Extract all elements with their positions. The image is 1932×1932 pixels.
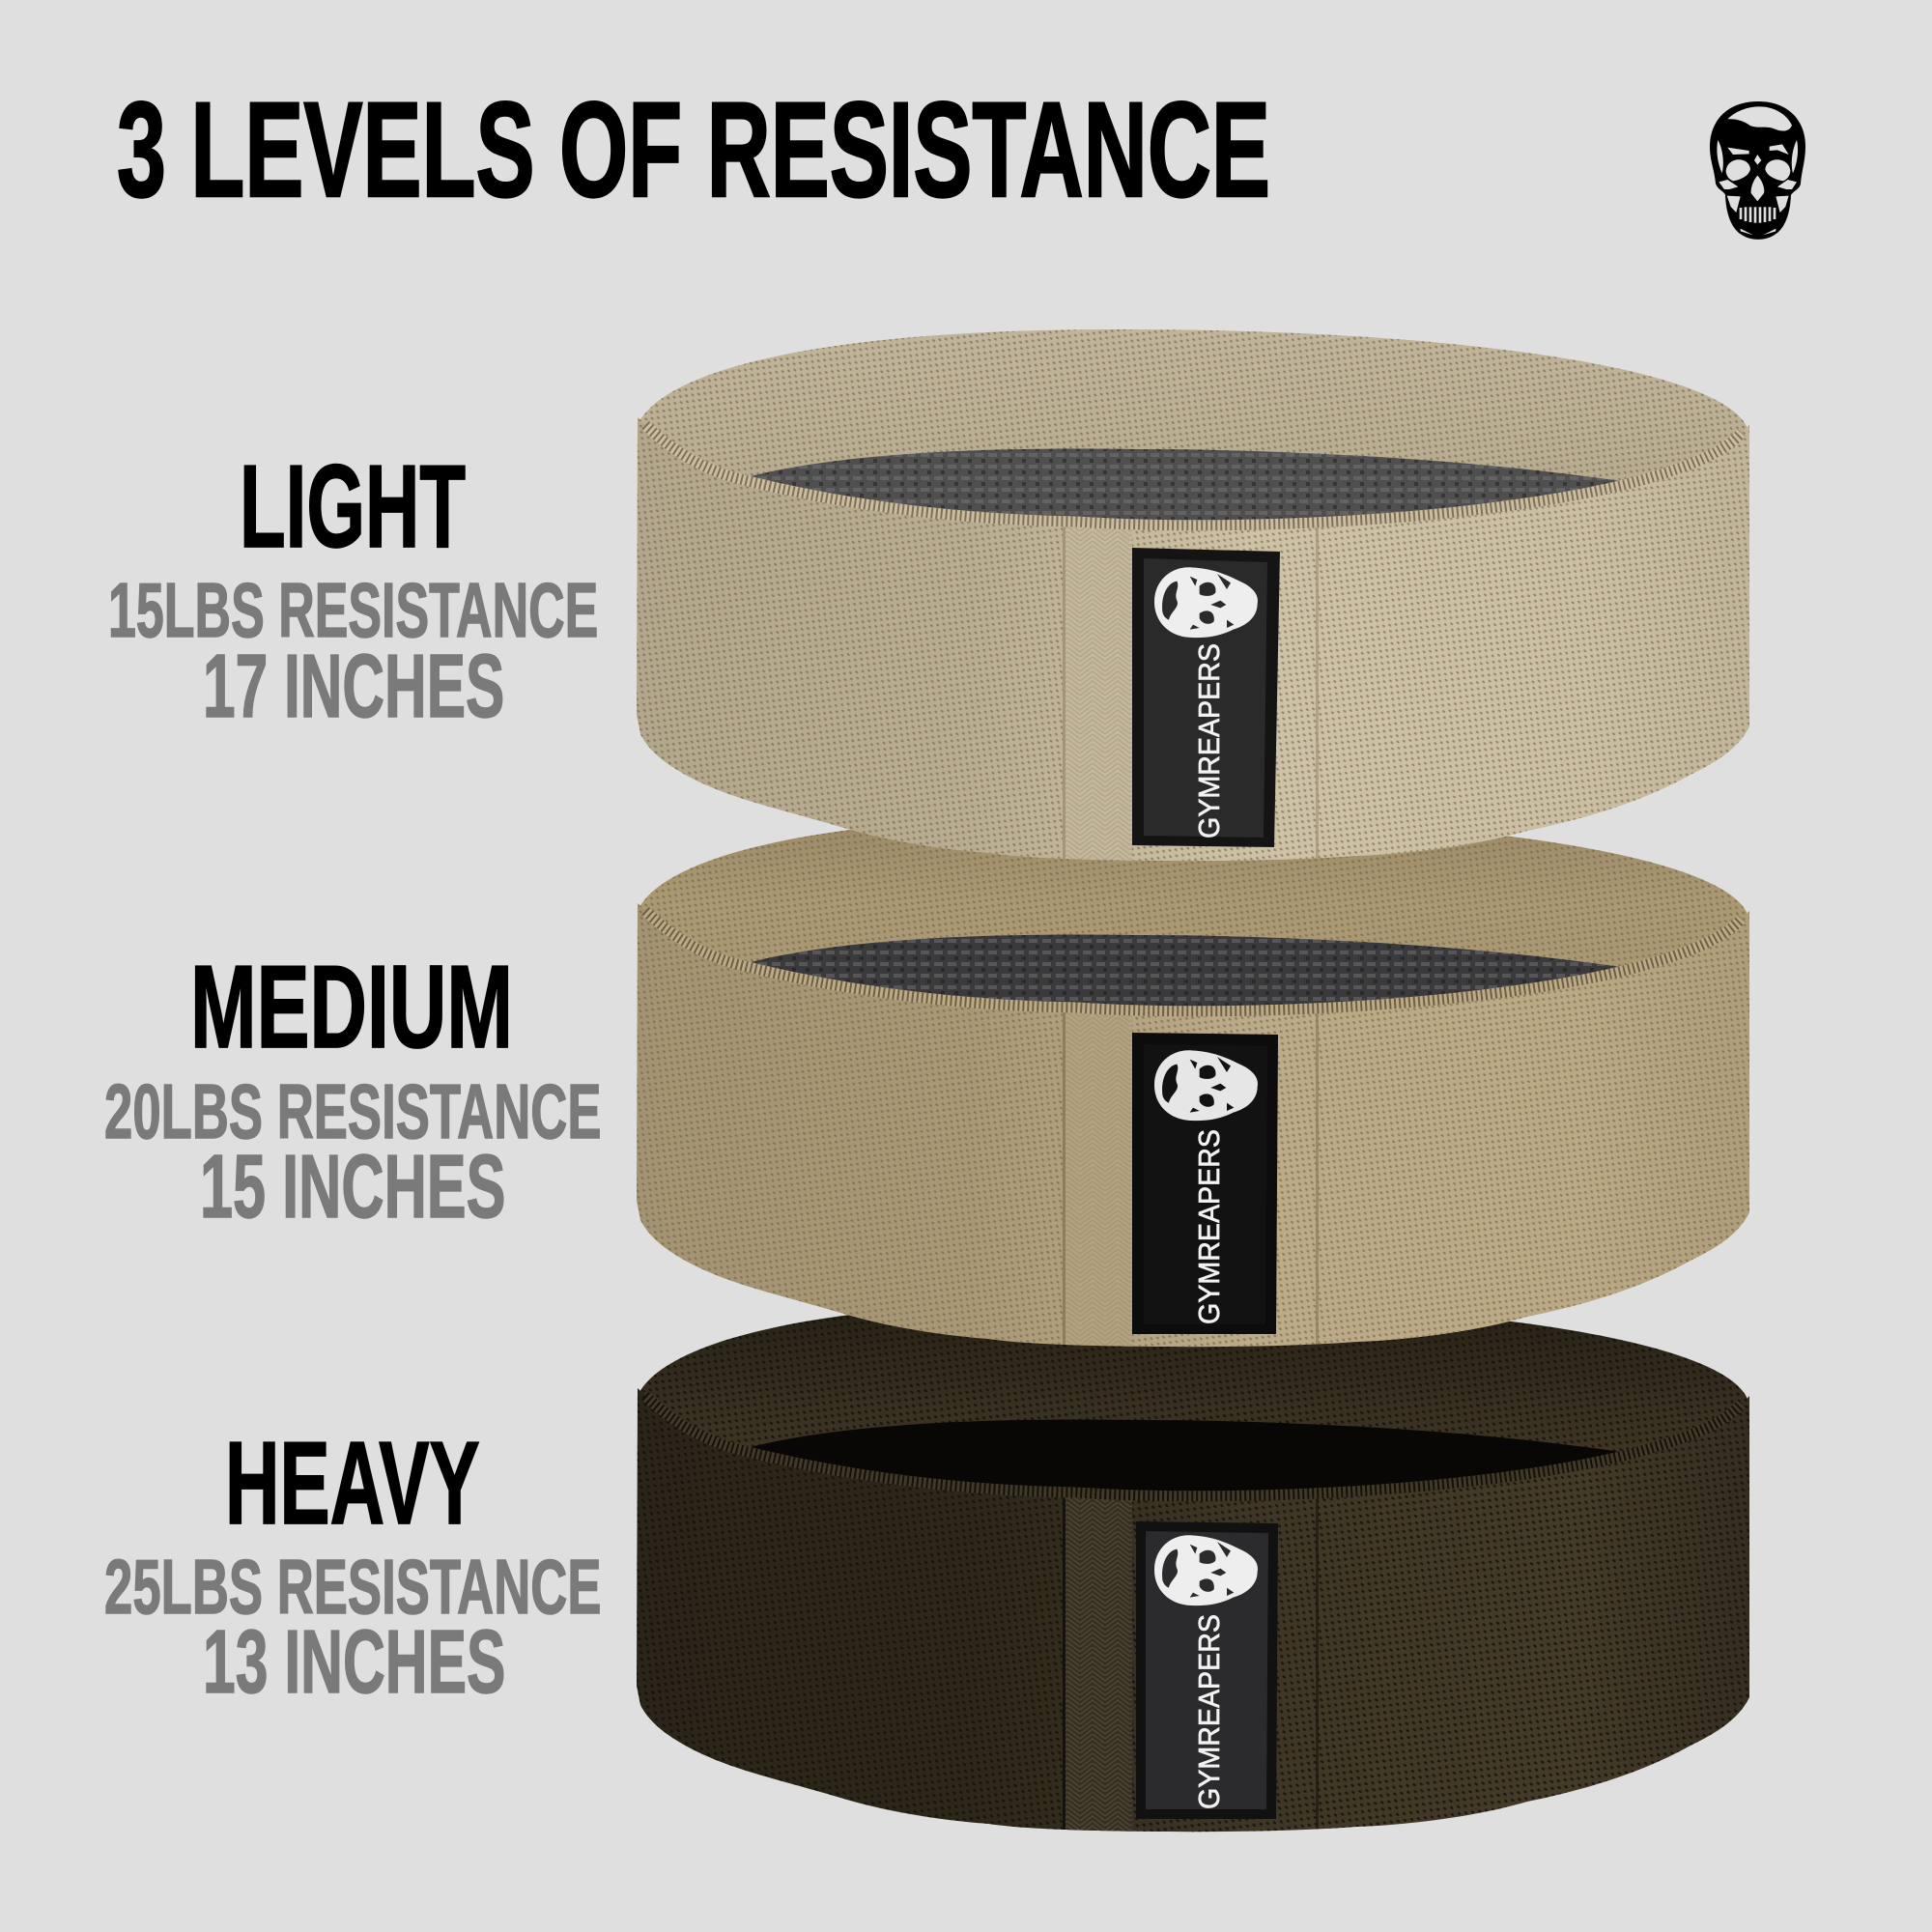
text: 15 INCHES bbox=[200, 1136, 506, 1236]
patch: GYMREAPERS bbox=[1192, 1614, 1226, 1809]
band: heavy bbox=[628, 1300, 1758, 1840]
front face bbox=[628, 406, 1758, 869]
patch bbox=[1132, 1033, 1278, 1334]
inner back wall bbox=[638, 1300, 1749, 1473]
text: 13 INCHES bbox=[203, 1611, 506, 1712]
inner dark lining bbox=[744, 934, 1633, 1012]
label: medium bbox=[104, 941, 601, 1236]
inner dark lining bbox=[744, 1419, 1633, 1497]
rim seam bbox=[645, 1396, 1742, 1496]
band: medium bbox=[628, 815, 1758, 1355]
inner dark lining bbox=[744, 448, 1633, 526]
band: light bbox=[628, 329, 1758, 869]
text: LIGHT bbox=[240, 440, 466, 572]
front face bbox=[628, 1377, 1758, 1840]
front face bbox=[628, 892, 1758, 1355]
patch bbox=[1132, 548, 1280, 847]
rim seam bbox=[645, 425, 1742, 526]
label: heavy bbox=[104, 1417, 601, 1712]
text: HEAVY bbox=[225, 1417, 480, 1548]
icon: skull logo bbox=[1710, 101, 1805, 240]
text: 17 INCHES bbox=[203, 636, 504, 736]
patch: GYMREAPERS bbox=[1192, 643, 1226, 838]
patch bbox=[1136, 1521, 1278, 1819]
patch: GYMREAPERS bbox=[1192, 1129, 1226, 1324]
inner back wall bbox=[638, 815, 1749, 988]
label: light bbox=[108, 440, 598, 736]
rim seam bbox=[645, 911, 1742, 1011]
inner back wall bbox=[638, 329, 1749, 502]
